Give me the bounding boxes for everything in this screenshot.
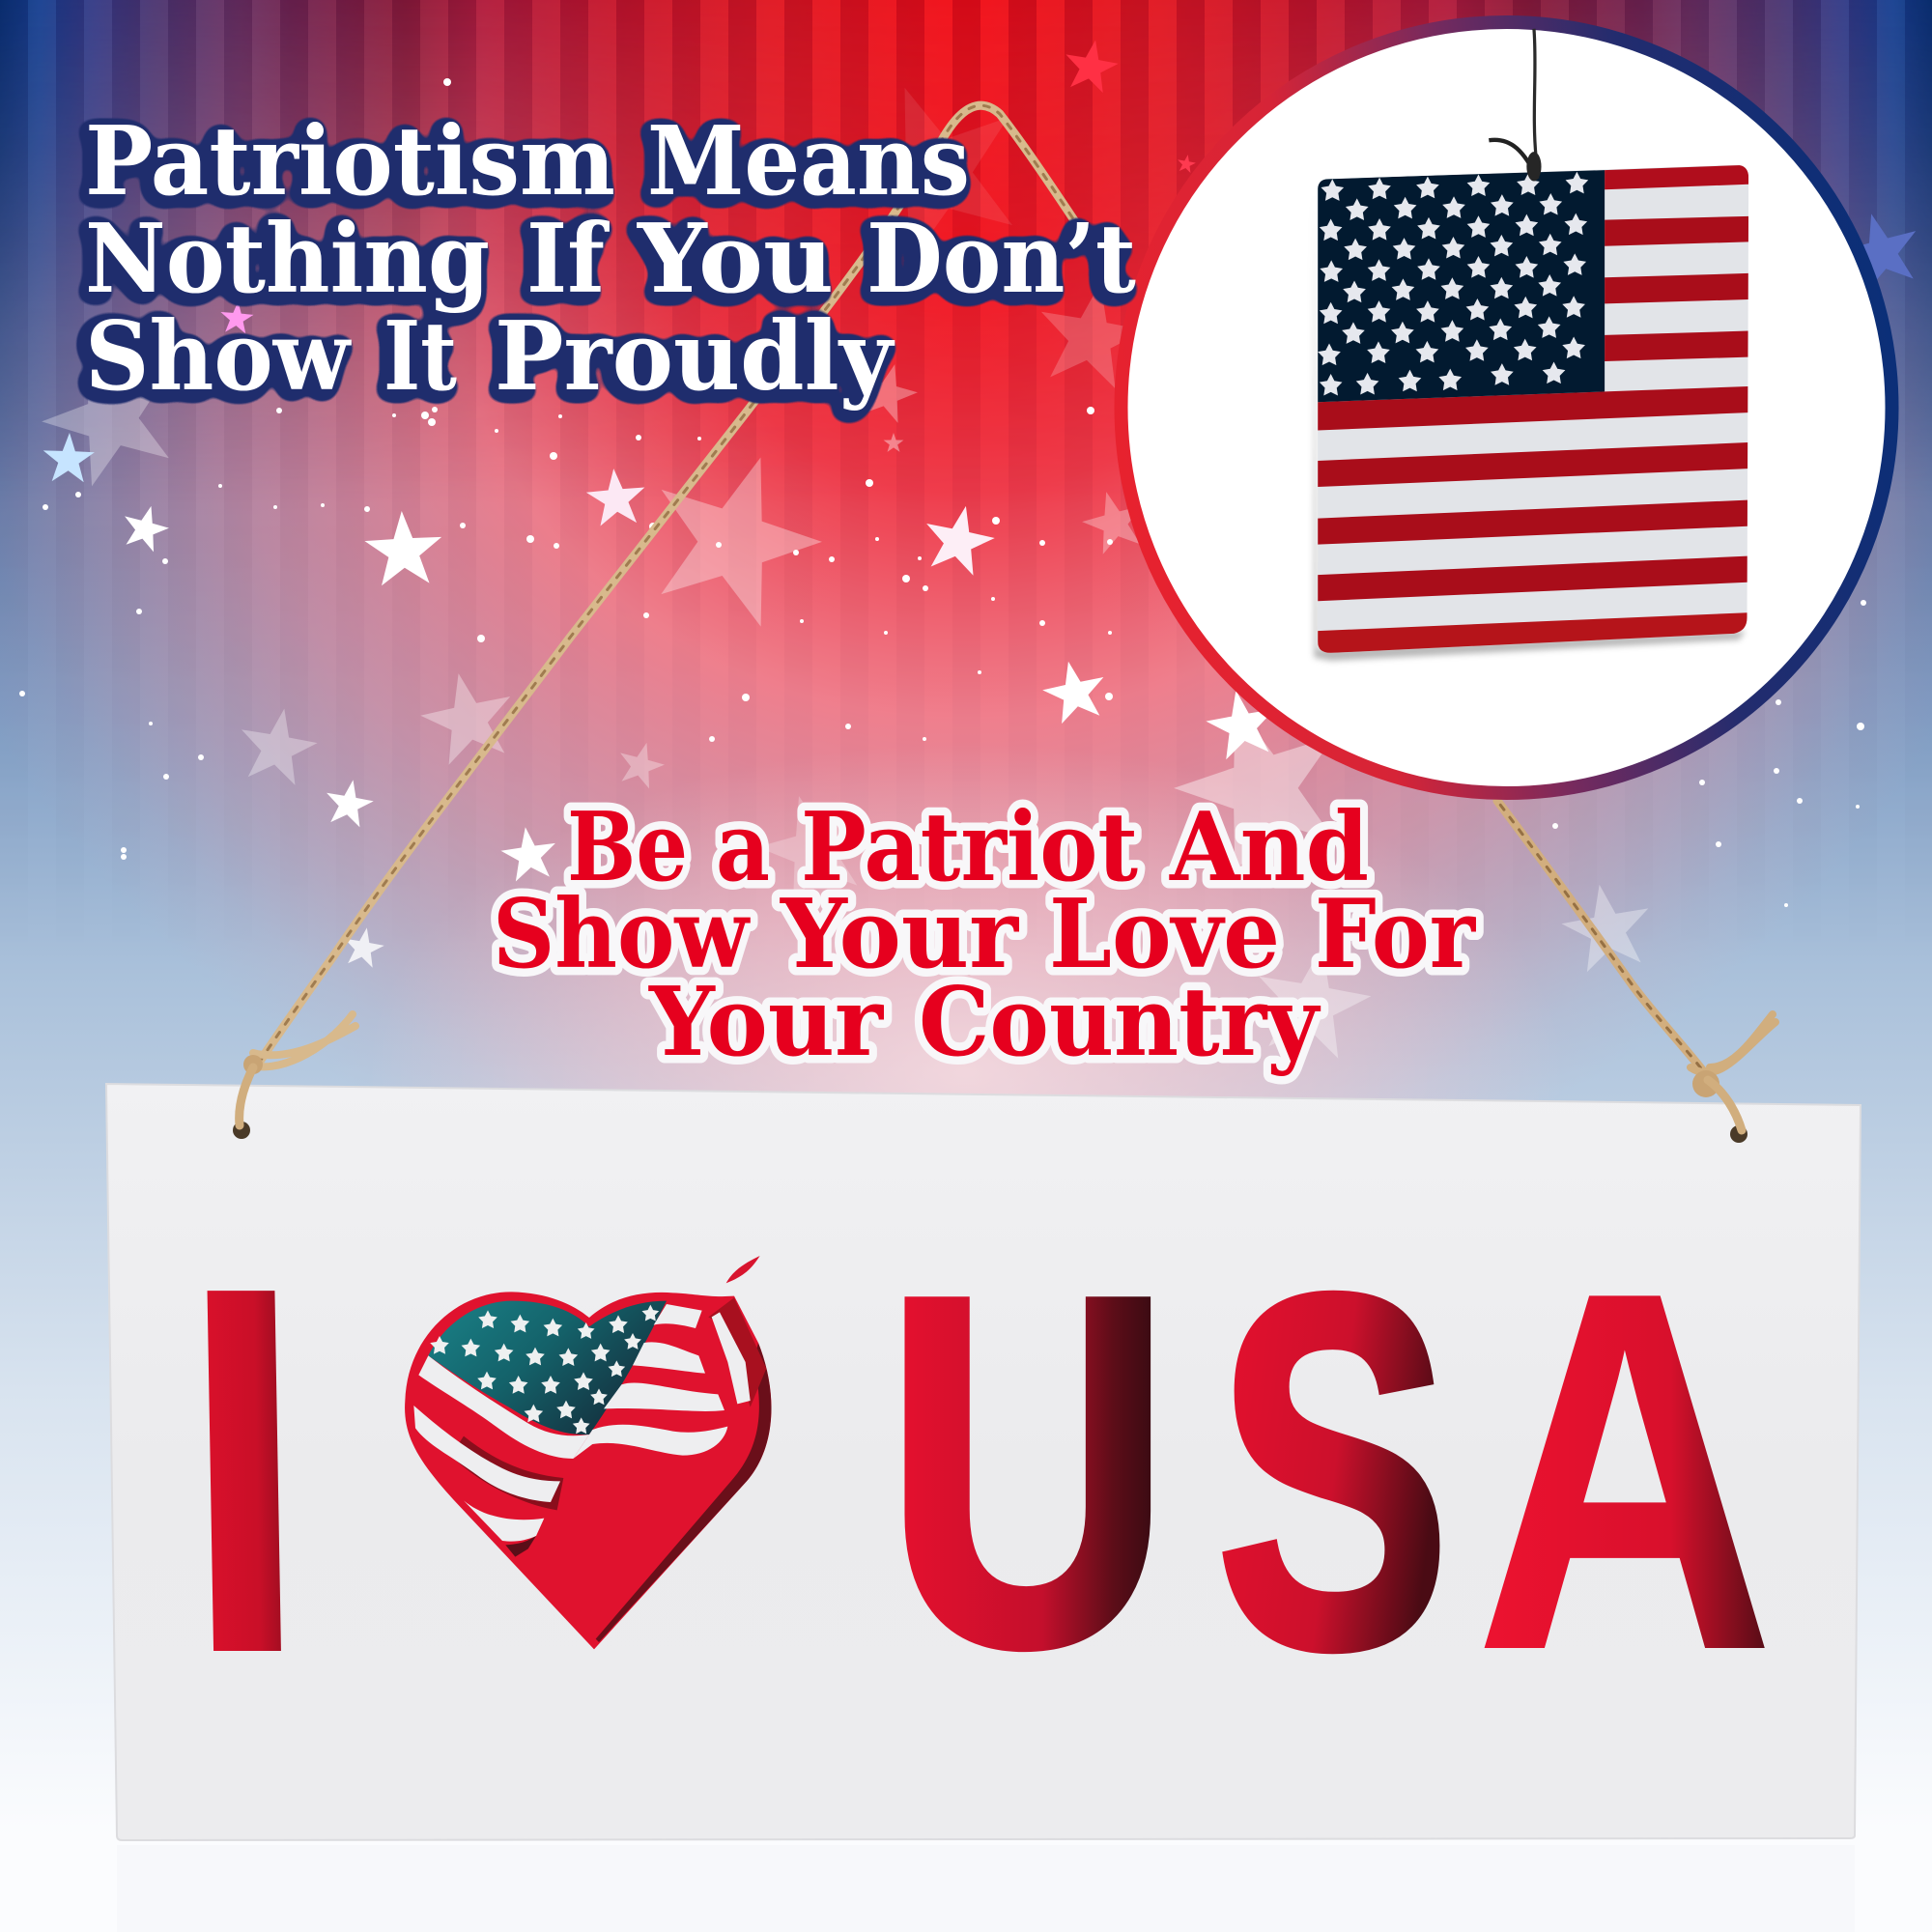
title: navy outlined heading: Means (647, 106, 970, 217)
subtitle: red outlined text: Love (1049, 879, 1280, 990)
subtitle: red outlined text: a (716, 792, 770, 903)
title: navy outlined heading: You (637, 204, 834, 315)
board face (106, 1084, 1861, 1840)
title: navy outlined heading: Patriotism (85, 106, 615, 217)
small white dots (19, 78, 1866, 907)
letter U: U (885, 1195, 1171, 1747)
title: navy outlined heading: It (384, 301, 457, 412)
subtitle: red outlined text: For (1315, 879, 1476, 990)
flag product (1310, 29, 1760, 661)
title: navy outlined heading: Don’t (867, 204, 1136, 315)
board reflection (117, 1845, 1855, 1932)
subtitle: red outlined text: Your (648, 967, 884, 1078)
subtitle: red outlined text (493, 792, 1476, 1078)
wooden sign board (106, 1067, 1861, 1932)
title: navy outlined heading: Show (85, 301, 352, 412)
subtitle: red outlined text: And (1169, 792, 1369, 903)
letter I: I (174, 1177, 314, 1762)
title: navy outlined heading: Proudly (495, 301, 895, 412)
subtitle: red outlined text: Patriot (801, 792, 1138, 903)
title: navy outlined heading: Nothing (85, 204, 490, 315)
inset circle (1121, 22, 1891, 793)
string holes (233, 1122, 1747, 1143)
letter S: S (1215, 1191, 1451, 1752)
subtitle: red outlined text: Be (567, 792, 688, 903)
translucent background stars (25, 36, 1927, 1063)
title: navy outlined heading: If (526, 204, 610, 315)
subtitle: red outlined text: Show (493, 879, 751, 990)
circular inset: flag air freshener (1121, 22, 1891, 793)
string ends in holes (240, 1067, 1742, 1130)
subtitle: red outlined text: Country (919, 967, 1321, 1078)
white foreground stars (43, 432, 1282, 969)
heart with flag (399, 1256, 785, 1652)
twine: hanging string of the sign (243, 105, 1776, 1097)
subtitle: red outlined text: Your (780, 879, 1019, 990)
title: navy outlined heading (85, 106, 1136, 412)
letter A: A (1474, 1184, 1776, 1757)
